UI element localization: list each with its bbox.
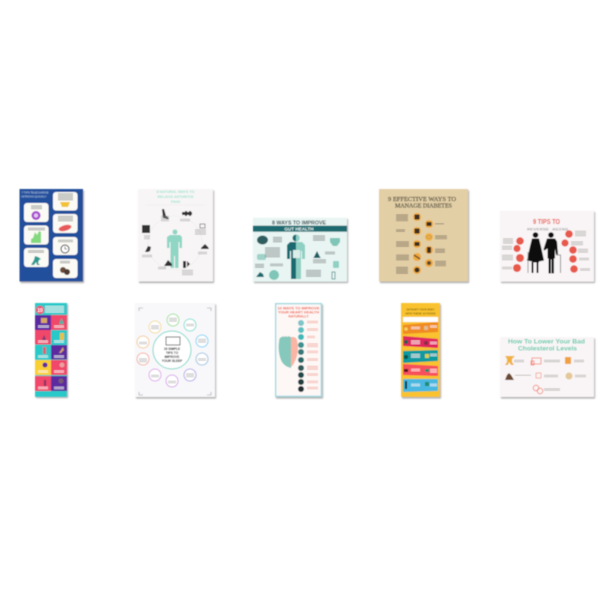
heading (406, 308, 436, 316)
icons (257, 236, 268, 244)
card: natural ways to relieve arthritis pain (138, 189, 214, 283)
icons: left column (413, 213, 421, 274)
card: colourful tiled infographic (35, 303, 68, 398)
heading: 9 EFFECTIVE WAYS TO (388, 196, 457, 203)
heading badge (36, 306, 44, 314)
satellite captions (139, 318, 206, 383)
heading: 8 WAYS TO IMPROVE (272, 220, 327, 226)
icons: right column (425, 220, 433, 267)
banner (253, 226, 347, 232)
card: effective ways to manage diabetes (379, 189, 469, 283)
heading (388, 196, 457, 210)
heading: WITH THESE 10 FOODS (406, 312, 436, 316)
tile grid (35, 315, 67, 391)
card: improve heart health (275, 303, 323, 398)
central hub: 10 SIMPLE (164, 347, 180, 351)
heading: RELIEVE ARTHRITIS (158, 194, 194, 199)
captions (142, 216, 207, 275)
heading (22, 190, 49, 198)
heading: 10 WAYS TO IMPROVE (278, 306, 320, 310)
icon: body (292, 234, 300, 242)
central hub (153, 331, 191, 369)
card: gut health (253, 218, 348, 283)
card: detox your body (401, 303, 441, 398)
left column tiles (24, 203, 48, 267)
central hub: TIPS TO (166, 351, 179, 355)
icon: heart (279, 336, 291, 368)
heading: 9 TIPS TO (533, 219, 560, 226)
icons: red circles (513, 230, 578, 273)
icons: remedies (142, 209, 209, 268)
card: gut health: GUT HEALTH (284, 226, 314, 232)
card: blue telecharge infographic (20, 189, 84, 283)
captions (502, 231, 590, 271)
card: tips to reverse aging: REVERSE AGING (527, 228, 569, 232)
heading: PAIN (171, 199, 180, 204)
icon: elderly couple (527, 232, 558, 274)
captions (255, 235, 335, 277)
heading: NATURALLY (288, 314, 309, 318)
heading (156, 189, 194, 204)
heading: How To Lower Your Bad (508, 338, 585, 345)
heading: 7 TIPS TELECHARGE (22, 190, 49, 194)
heading (508, 338, 585, 353)
icon column (298, 320, 304, 392)
heading: DETOXIFY YOUR BODY (406, 308, 435, 312)
tile icons (41, 318, 64, 386)
captions (307, 321, 318, 390)
band icons (404, 326, 429, 389)
central hub: YOUR SLEEP (162, 359, 183, 363)
coloured bands (403, 322, 438, 392)
right column tiles (53, 192, 78, 278)
card: simple tips mind map (135, 303, 216, 398)
card: lower bad cholesterol (500, 337, 595, 398)
tile captions (38, 325, 64, 389)
heading (278, 306, 320, 318)
satellite circles (137, 314, 208, 387)
captions (396, 214, 447, 274)
captions (514, 360, 586, 391)
band captions (411, 325, 437, 387)
heading: 8 NATURAL WAYS TO (156, 189, 194, 194)
icons (505, 356, 572, 394)
card: tips to reverse aging (500, 211, 595, 283)
heading: YOUR HEART HEALTH (278, 310, 320, 314)
central hub: IMPROVE (165, 355, 179, 359)
icon: human figure (167, 235, 182, 268)
heading: MANAGE DIABETES (395, 202, 453, 210)
heading: Cholesterol Levels (518, 346, 577, 353)
heading: NITROXA QUICKLY (22, 194, 47, 198)
card: colourful tiled infographic: 10 (37, 308, 43, 314)
